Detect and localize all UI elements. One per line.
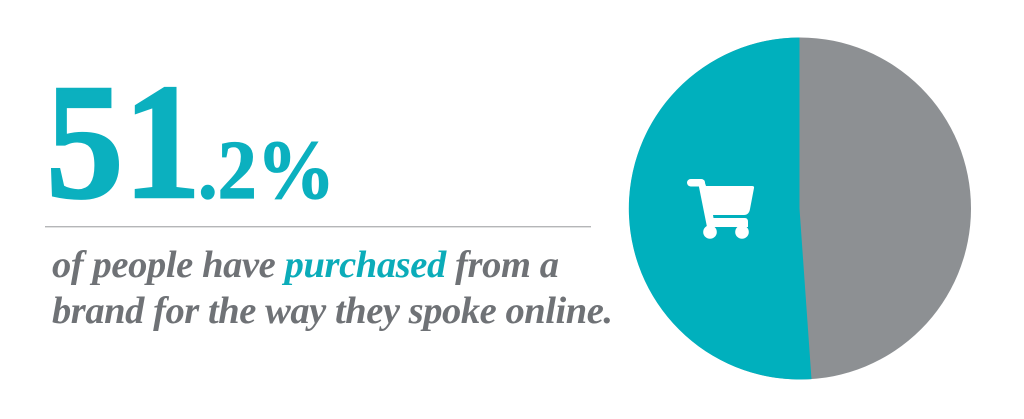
description text: brand for the way they spoke online. [52, 290, 613, 332]
headline statistic: 51.2% [46, 50, 335, 233]
icon: shopping cart [687, 179, 754, 239]
pie chart: 51.2% vs 48.8% [629, 38, 971, 380]
headline statistic: 51.2%: 51 [46, 50, 201, 233]
divider rule [45, 226, 591, 227]
pie slice: gray 48.8% [629, 38, 971, 380]
headline statistic: 51.2%: .2% [198, 124, 335, 217]
pie slice: teal 51.2% [629, 38, 812, 379]
description text: of people have purchased from a [52, 244, 559, 286]
description text [52, 244, 613, 332]
